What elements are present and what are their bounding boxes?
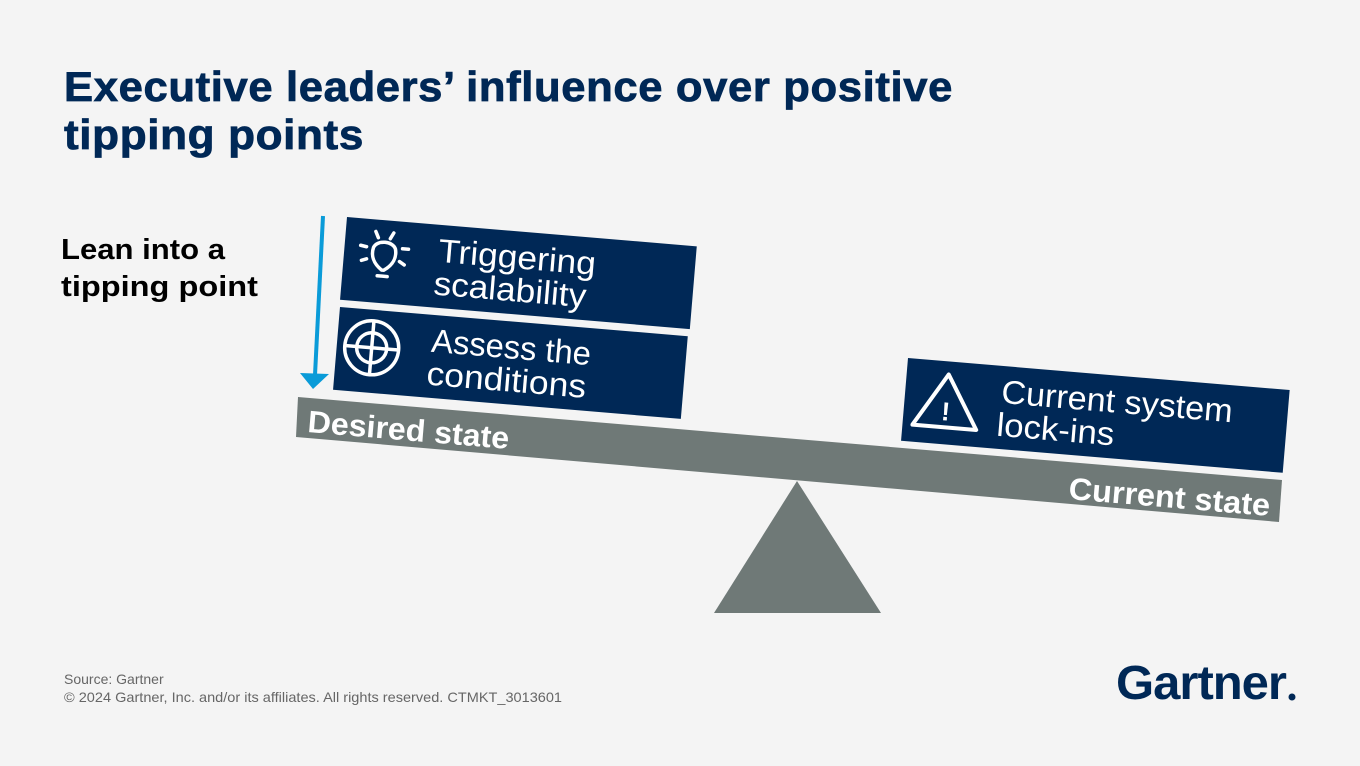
icon: warning: !: [940, 396, 951, 427]
fulcrum: [714, 481, 881, 613]
title: tipping points: [64, 111, 364, 158]
box: triggering scalability: scalability: [432, 265, 588, 314]
beam: Current state: [1067, 471, 1272, 523]
box: triggering scalability: [340, 217, 697, 329]
box: triggering scalability: Triggering: [437, 232, 598, 282]
beam: [296, 397, 1282, 523]
logo: Gartner: [1116, 657, 1286, 710]
box: current system lock-ins: [901, 358, 1290, 473]
icon: radar: [343, 319, 401, 377]
icon: lightbulb: [358, 230, 410, 278]
lean label: [61, 234, 258, 303]
icon: warning: [912, 372, 981, 430]
box: assess the conditions: Assess the: [430, 322, 593, 372]
source: © 2024 Gartner, Inc. and/or its affiliates. All rights reserved. CTMKT_3013601: [64, 689, 562, 705]
arrow: down: [300, 216, 329, 389]
source: [64, 671, 562, 705]
source: Source: Gartner: [64, 671, 164, 687]
box: assess the conditions: conditions: [425, 355, 588, 405]
lean label: Lean into a: [61, 234, 226, 266]
box: assess the conditions: [333, 307, 688, 419]
box: current system lock-ins: lock-ins: [995, 406, 1116, 452]
title: Executive leaders’ influence over positive: [64, 63, 953, 110]
beam: Desired state: [306, 404, 511, 456]
title: [64, 63, 953, 158]
box: current system lock-ins: Current system: [1000, 373, 1234, 429]
lean label: tipping point: [61, 271, 258, 303]
